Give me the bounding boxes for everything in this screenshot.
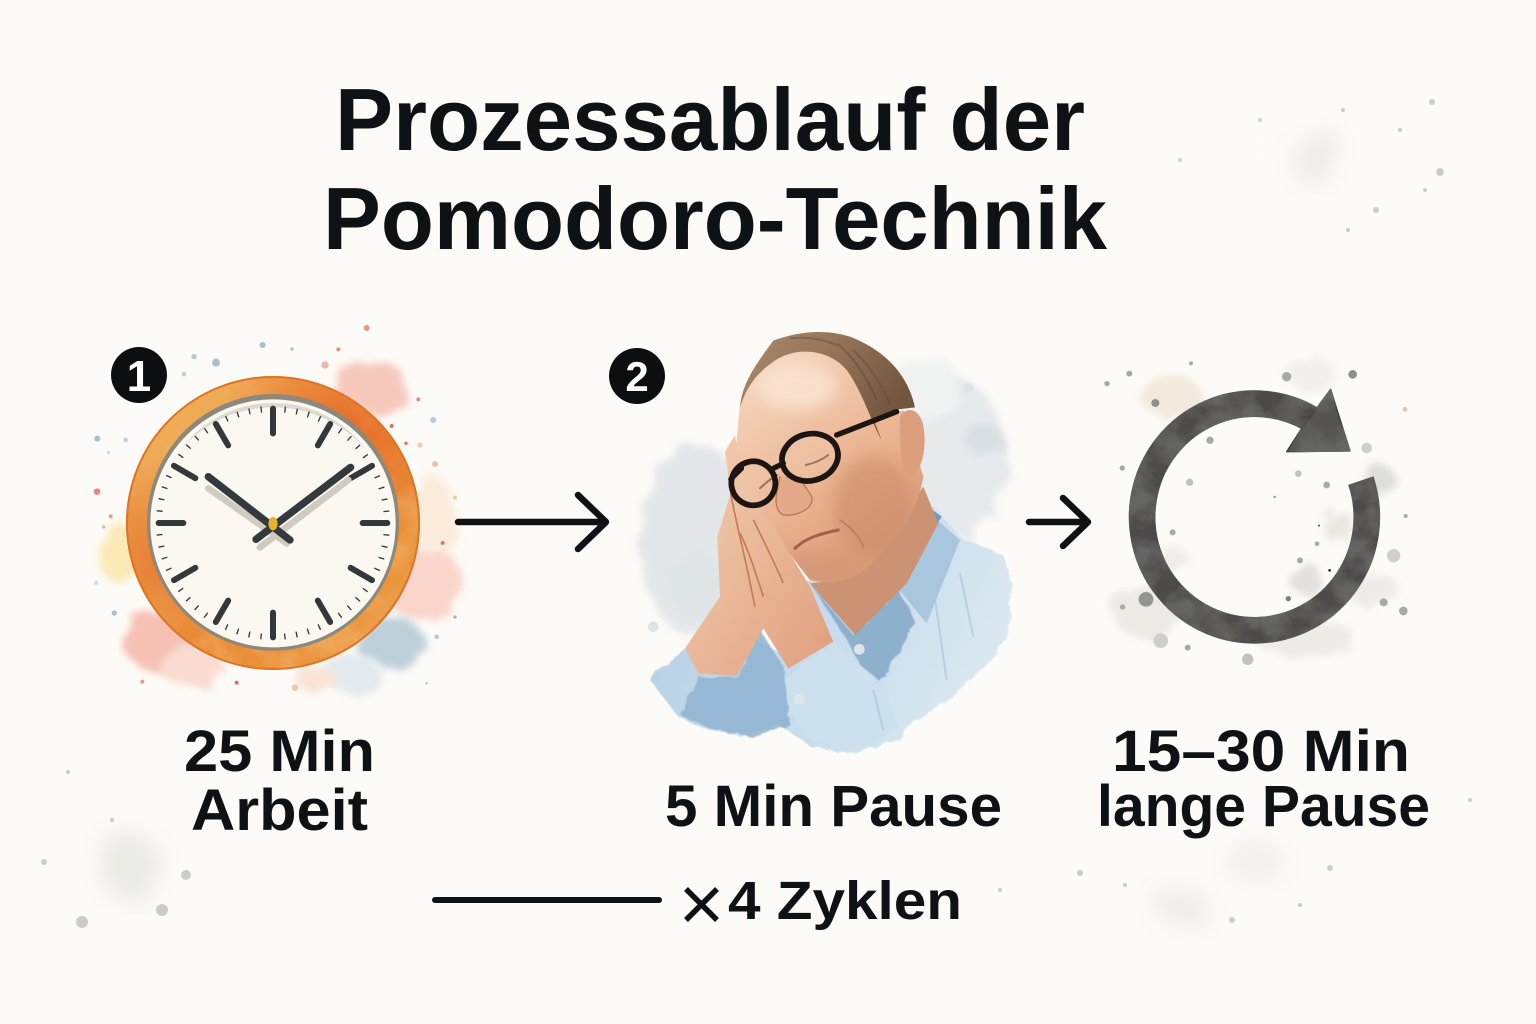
praying hands under cheek xyxy=(685,435,833,676)
arrow from work to short break xyxy=(458,495,606,549)
step 3: circular repeat arrow illustration xyxy=(1104,355,1408,665)
glasses xyxy=(726,412,897,510)
badge 2: 2 xyxy=(625,353,649,400)
hour ticks xyxy=(159,409,387,637)
label: 25 min work: 25 Min xyxy=(184,719,375,784)
clock bezel xyxy=(126,376,420,670)
label: times 4 cycles: 4 Zyklen xyxy=(728,871,962,931)
label: 25 min work: Arbeit xyxy=(191,778,368,843)
title: Prozessablauf der xyxy=(335,70,1085,169)
badge 1 xyxy=(111,347,167,403)
paint speckles around clock xyxy=(94,325,457,691)
neck xyxy=(810,487,938,635)
grey wash behind loop xyxy=(1113,355,1398,657)
grey-blue wash behind man xyxy=(640,353,1007,637)
title: Pomodoro-Technik xyxy=(323,169,1108,268)
infographic canvas xyxy=(41,86,1472,930)
label: 15-30 min long break: 15–30 Min xyxy=(1112,719,1410,784)
nose, eyes and mouth xyxy=(760,455,863,548)
step 2: sleeping man illustration xyxy=(640,332,1013,752)
label: 25 min work xyxy=(184,719,375,843)
ear xyxy=(900,410,925,475)
badge 2 xyxy=(609,348,665,404)
step 1: clock illustration xyxy=(94,325,462,693)
head and face xyxy=(735,347,923,583)
minute ticks xyxy=(159,409,387,637)
clock face xyxy=(147,394,399,651)
cycle line xyxy=(435,897,659,903)
badge 1: 1 xyxy=(127,352,151,401)
label: 15-30 min long break xyxy=(1097,719,1430,839)
ring and arrow head xyxy=(1142,389,1367,630)
background paint splashes xyxy=(41,99,1472,928)
title xyxy=(323,70,1108,268)
hair xyxy=(740,332,915,440)
label: 5 min break: 5 Min Pause xyxy=(665,774,1002,839)
shirt xyxy=(650,503,1013,752)
loop speckles xyxy=(1104,361,1408,665)
label: 15-30 min long break: lange Pause xyxy=(1097,774,1430,839)
watercolor splashes behind clock xyxy=(100,360,462,693)
clock hands with shadow xyxy=(208,467,351,547)
arrow from short break to long break xyxy=(1029,498,1088,546)
